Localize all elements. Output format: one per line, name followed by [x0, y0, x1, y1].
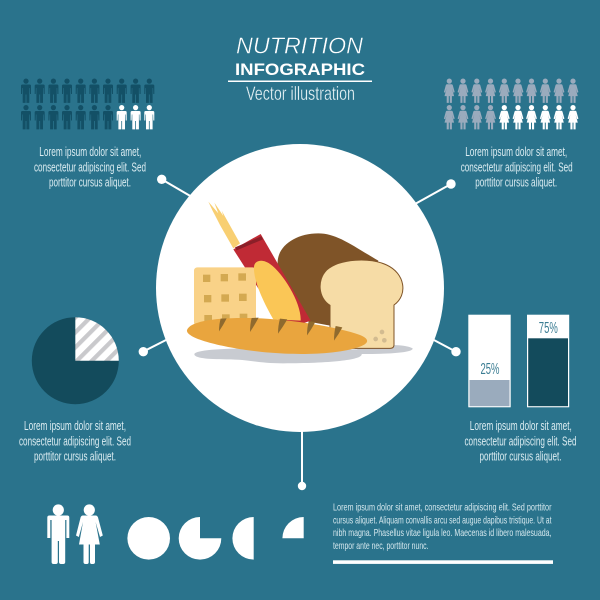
people chart: women: [444, 78, 578, 129]
bar chart: 25% and 75%: [468, 315, 569, 407]
title: [228, 32, 372, 105]
text: left: [19, 418, 131, 464]
central white circle: [156, 144, 444, 432]
pie chart: [32, 317, 119, 404]
icon: half circle: [232, 517, 254, 560]
yellow roll: [254, 261, 301, 321]
bar 25 percent: 25%: [480, 361, 500, 378]
text: right: [464, 418, 576, 464]
text: top left: [34, 144, 146, 190]
icon: woman: [76, 504, 103, 564]
text: left: consectetur adipiscing elit. Sed: [19, 434, 131, 448]
icon: full circle: [127, 517, 170, 560]
wheat: [208, 202, 240, 248]
connector: right: [432, 339, 461, 356]
connector: top left: [157, 175, 192, 197]
front slice: [320, 260, 403, 348]
title: NUTRITION: [236, 32, 363, 58]
gap beside the roll: [256, 287, 274, 321]
text: top left: porttitor cursus aliquet.: [49, 174, 131, 190]
text: top left: Lorem ipsum dolor sit amet,: [39, 144, 141, 159]
red package stripe: [235, 236, 263, 250]
icon: man: [47, 504, 69, 564]
bar 75 percent: 75%: [539, 320, 558, 337]
red package: [233, 234, 311, 330]
text: bottom paragraph: [333, 502, 552, 552]
text: top right: [461, 144, 573, 190]
title: INFOGRAPHIC: [235, 60, 365, 79]
people chart: men: [21, 78, 154, 129]
text: left: porttitor cursus aliquet.: [34, 448, 116, 464]
icon: quarter circle: [282, 517, 304, 538]
shadow: [194, 345, 413, 363]
cracker: [194, 267, 256, 326]
bottom rule: [333, 560, 553, 564]
title: Vector illustration: [246, 84, 355, 105]
text: top left: consectetur adipiscing elit. Sed: [34, 160, 146, 174]
dark loaf: [278, 233, 378, 330]
connector: bottom: [298, 430, 306, 490]
connector: left: [139, 339, 168, 356]
text: bottom paragraph: tempor ante nec, porttitor nunc.: [333, 540, 428, 552]
food illustration: breads: [187, 202, 413, 363]
connector: top right: [415, 179, 456, 204]
baguette: [187, 318, 367, 354]
slice crumbs: [373, 330, 387, 343]
baguette slashes: [219, 318, 342, 341]
icon: three-quarter circle: [179, 517, 221, 560]
text: left: Lorem ipsum dolor sit amet,: [24, 418, 126, 433]
